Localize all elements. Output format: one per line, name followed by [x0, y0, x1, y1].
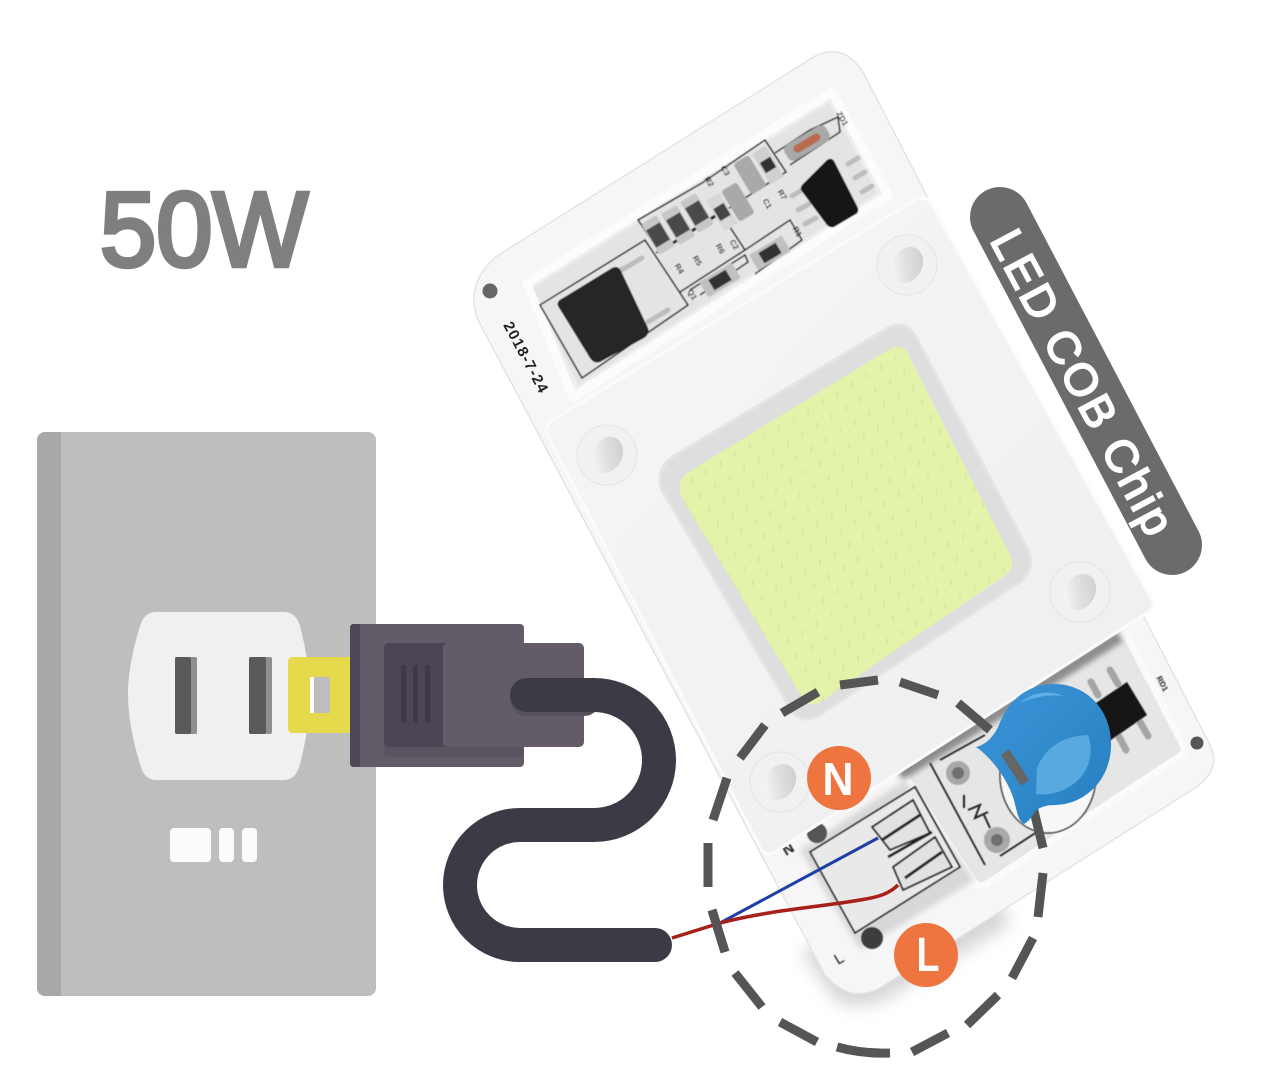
badge L: L [916, 929, 940, 982]
outlet slots [175, 657, 272, 734]
component labels: R6 [714, 242, 727, 256]
dash on varistor [1005, 752, 1025, 783]
component labels: R7 [776, 188, 789, 202]
component labels: C1 [761, 197, 774, 211]
component labels: R1 [791, 225, 804, 239]
title: 50W: 50W [100, 171, 308, 289]
rectifier leads [1091, 670, 1148, 750]
mounting holes [577, 235, 1110, 812]
raised centre panel [546, 198, 1153, 854]
badge L [894, 923, 958, 987]
component labels: ZD1 [834, 110, 850, 128]
terminal clips [872, 800, 930, 850]
dashed highlight circle [708, 680, 1043, 1053]
terminal block [779, 780, 975, 968]
pad labels: N [779, 839, 797, 859]
varistor solder section: RD1 [1154, 675, 1170, 693]
driver IC [801, 159, 858, 227]
varistor highlights [1020, 693, 1091, 794]
resistors [641, 145, 791, 298]
bottom recess [905, 636, 1184, 886]
cable [460, 695, 659, 945]
component labels: C2 [728, 238, 741, 252]
blue wire [672, 838, 878, 938]
COB emitter [680, 347, 1012, 704]
diode ZD1 [782, 123, 832, 163]
silkscreen outlines [540, 117, 840, 378]
transistor leads [618, 158, 872, 322]
top recess with driver components [527, 92, 888, 397]
red wire [672, 885, 898, 938]
component labels [673, 110, 850, 302]
label pill: LED COB Chip: LED COB Chip [981, 221, 1184, 543]
badge N [807, 746, 871, 810]
LED COB board shadow [800, 900, 1010, 1006]
component labels: Q1 [686, 288, 699, 302]
date code: 2018-7-24 [499, 319, 551, 396]
yellow prong [288, 657, 352, 733]
component labels: R2 [703, 175, 716, 189]
badge N: N [822, 753, 854, 805]
wall plate with outlet [37, 432, 376, 996]
component labels: R5 [691, 254, 704, 268]
plug [288, 624, 584, 767]
component labels: C3 [719, 164, 732, 178]
transistor Q1 [558, 267, 648, 362]
dash over wires [712, 910, 725, 952]
solder pads [807, 823, 827, 843]
terminal block: L [831, 950, 847, 968]
rectifier RD1 [1093, 682, 1147, 742]
varistor solder section [930, 670, 1170, 865]
COB recess [660, 325, 1031, 719]
mounting dot bottom [1190, 736, 1204, 750]
ground markers [170, 828, 257, 862]
LED COB board [474, 52, 1214, 994]
outlet face [128, 612, 310, 780]
panel shadow in recess [900, 636, 1120, 775]
cable end over plug [527, 695, 590, 699]
component labels: R4 [673, 262, 686, 276]
mounting dot top [482, 284, 498, 298]
varistor [976, 684, 1111, 824]
